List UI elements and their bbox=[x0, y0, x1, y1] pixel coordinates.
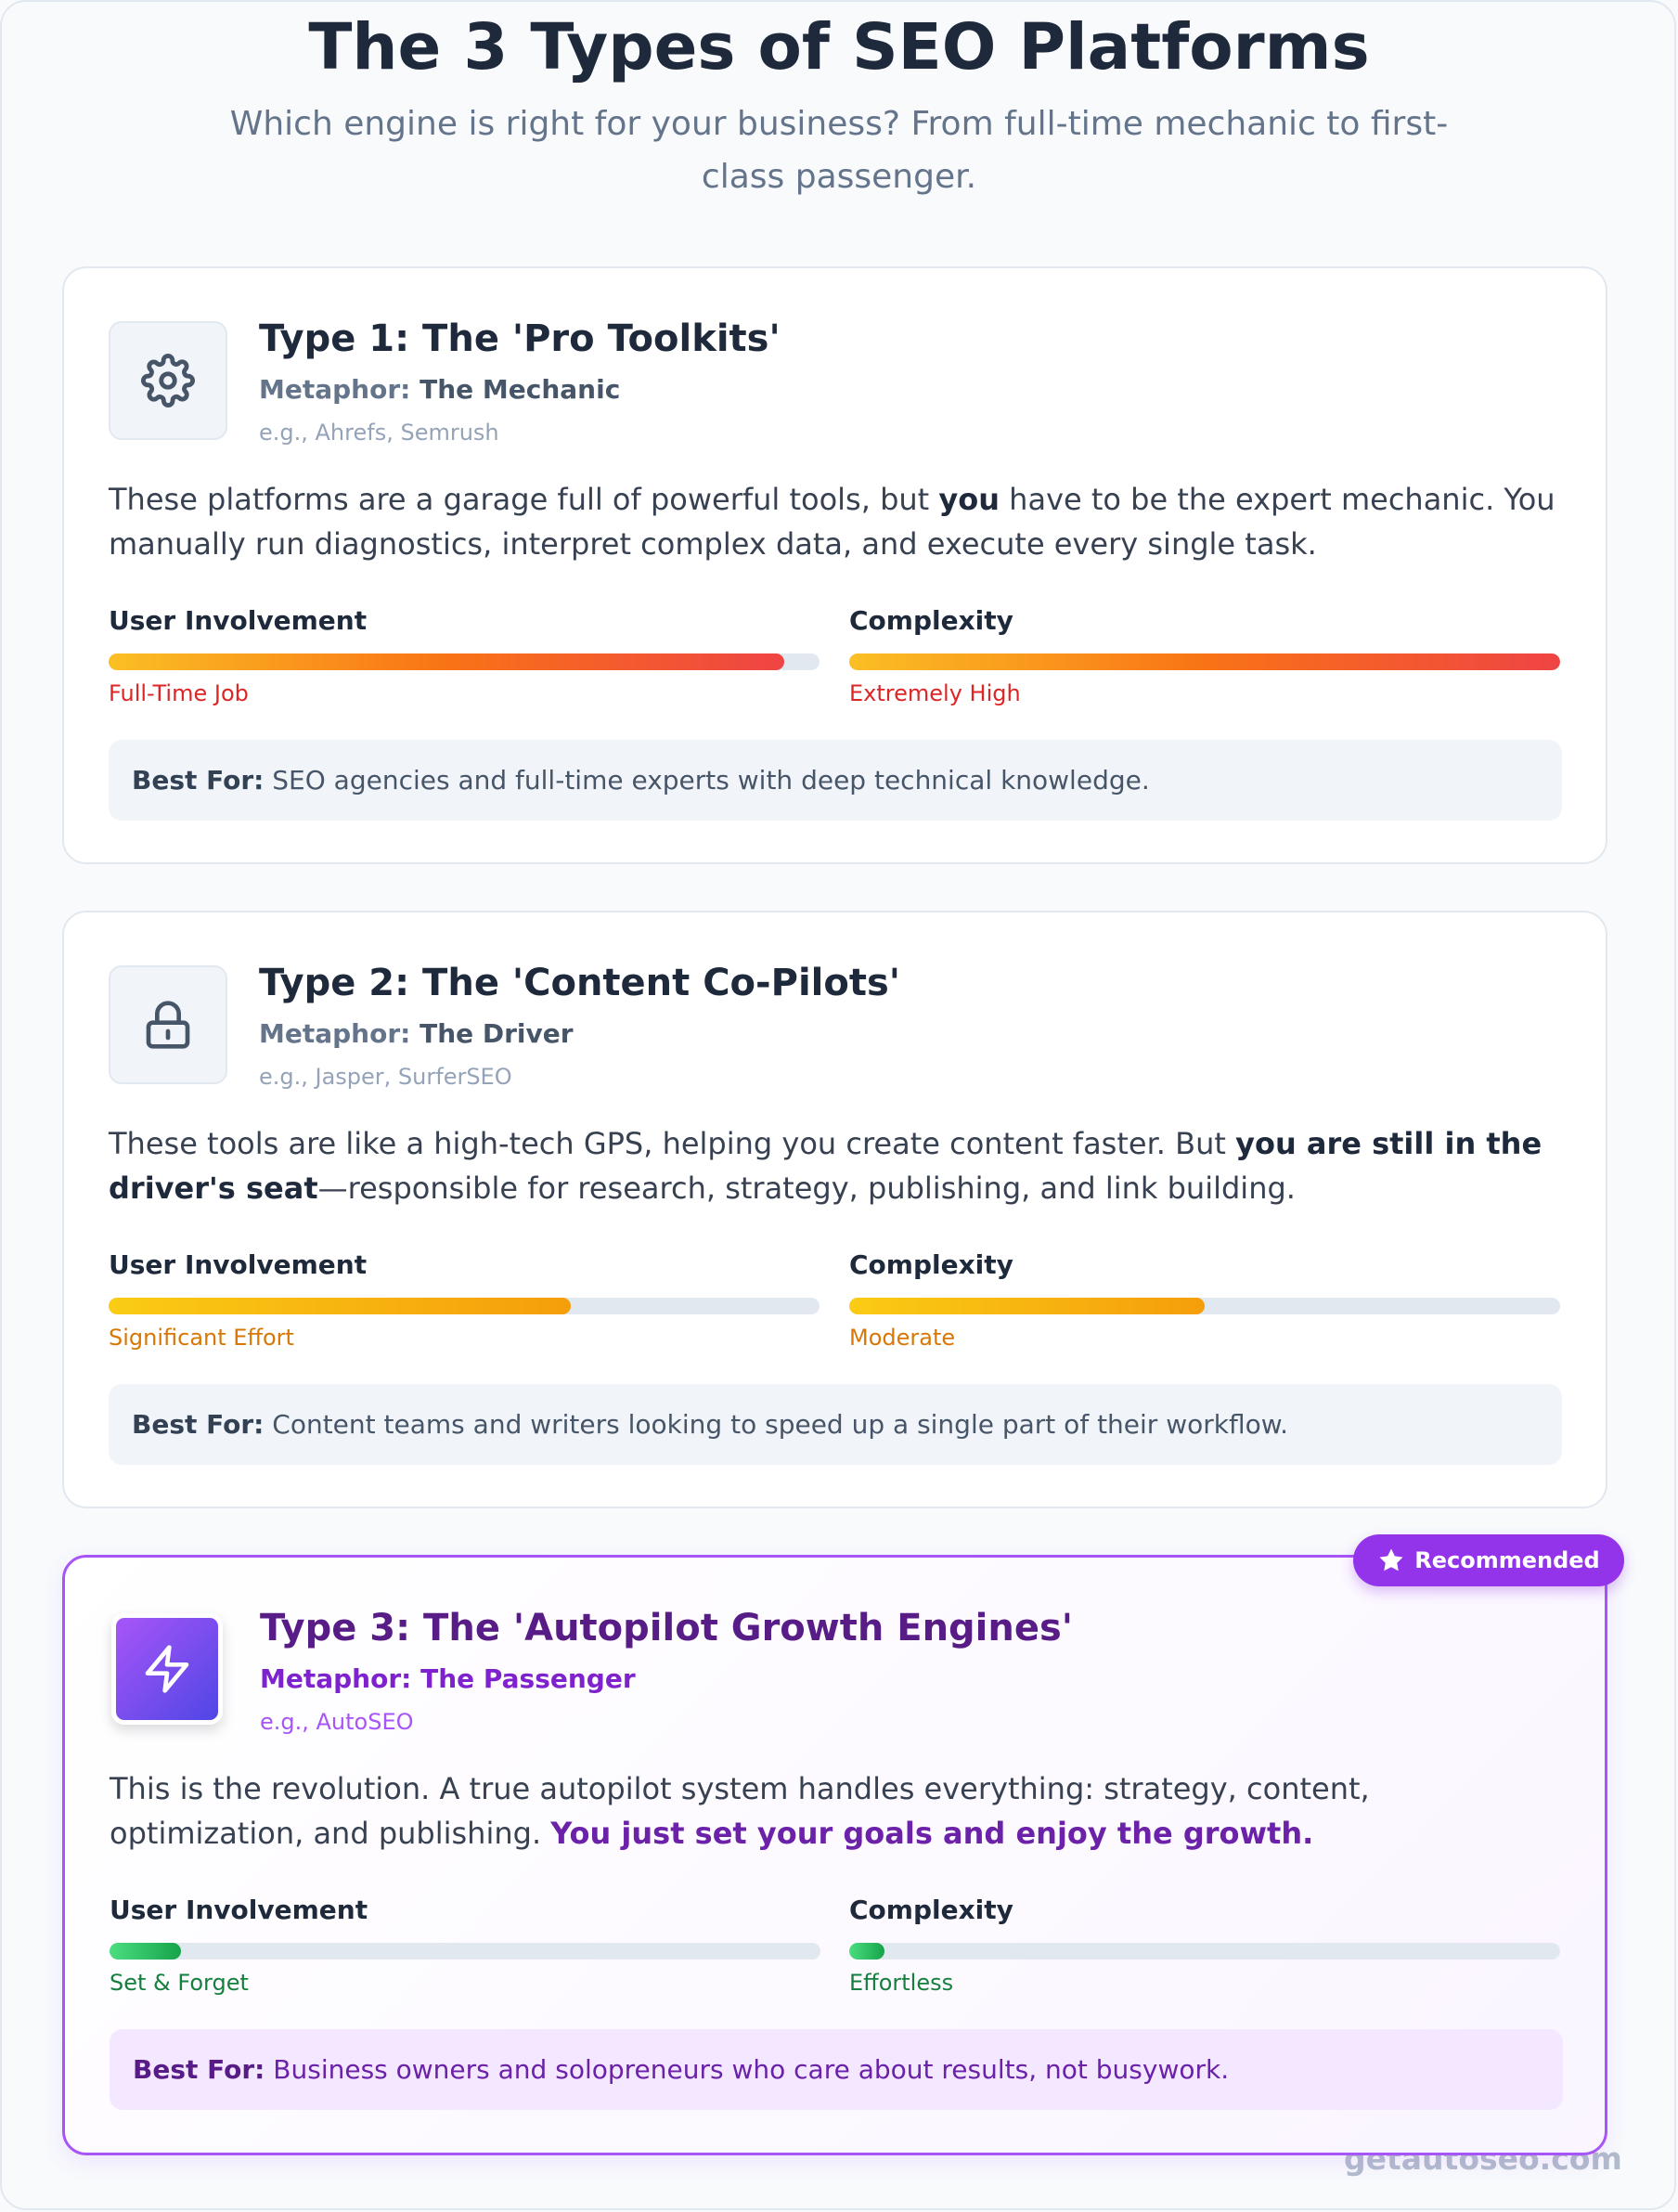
caption: Moderate bbox=[849, 1325, 955, 1351]
metaphor: Metaphor: The Driver bbox=[259, 1018, 574, 1049]
caption: Set & Forget bbox=[110, 1970, 249, 1996]
bar: complexity bbox=[849, 1298, 1560, 1314]
icon: lock bbox=[109, 965, 227, 1084]
icon: gear bbox=[109, 321, 227, 440]
label: user involvement: User Involvement bbox=[109, 1249, 367, 1280]
label: complexity: Complexity bbox=[849, 605, 1013, 636]
best for bbox=[109, 740, 1562, 821]
description: This is the revolution. A true autopilot system handles everything: strategy, content, optimization, and publishing. You just set your goals and enjoy the growth. bbox=[110, 1771, 1370, 1851]
examples: e.g., Ahrefs, Semrush bbox=[259, 420, 499, 446]
label: complexity: Complexity bbox=[849, 1895, 1013, 1925]
best for: Best For: Content teams and writers looking to speed up a single part of their workflow. bbox=[132, 1409, 1288, 1440]
caption: Full-Time Job bbox=[109, 680, 249, 706]
caption: Significant Effort bbox=[109, 1325, 294, 1351]
panel: type 2 bbox=[62, 911, 1607, 1508]
best for bbox=[109, 1384, 1562, 1465]
bar: user involvement bbox=[109, 653, 820, 670]
examples: e.g., AutoSEO bbox=[260, 1709, 414, 1735]
caption: Extremely High bbox=[849, 680, 1021, 706]
best for bbox=[110, 2029, 1563, 2110]
label: user involvement: User Involvement bbox=[110, 1895, 368, 1925]
bar: user involvement bbox=[109, 1298, 820, 1314]
subtitle: Which engine is right for your business? From full-time mechanic to first-class passenger. bbox=[230, 105, 1448, 196]
metaphor: Metaphor: The Passenger bbox=[260, 1663, 636, 1694]
label: user involvement: User Involvement bbox=[109, 605, 367, 636]
description: These platforms are a garage full of powerful tools, but you have to be the expert mechanic. You manually run diagnostics, interpret complex data, and execute every single task. bbox=[109, 482, 1555, 562]
best for: Best For: SEO agencies and full-time experts with deep technical knowledge. bbox=[132, 765, 1150, 796]
badge: recommended: Recommended bbox=[1414, 1547, 1600, 1573]
label: complexity: Complexity bbox=[849, 1249, 1013, 1280]
best for: Best For: Business owners and solopreneurs who care about results, not busywork. bbox=[133, 2054, 1229, 2085]
icon: lightning bbox=[111, 1613, 223, 1725]
icon: star bbox=[1379, 1548, 1403, 1571]
bar: complexity bbox=[849, 1943, 1560, 1960]
heading: Type 3: The 'Autopilot Growth Engines' bbox=[260, 1607, 1073, 1649]
description: These tools are like a high-tech GPS, helping you create content faster. But you are still in the driver's seat—responsible for research, strategy, publishing, and link building. bbox=[109, 1126, 1542, 1206]
bar: user involvement bbox=[110, 1943, 820, 1960]
panel: type 3 bbox=[62, 1555, 1607, 2155]
heading: Type 1: The 'Pro Toolkits' bbox=[259, 317, 781, 360]
title: The 3 Types of SEO Platforms bbox=[308, 10, 1370, 84]
heading: Type 2: The 'Content Co-Pilots' bbox=[259, 962, 900, 1004]
caption: Effortless bbox=[849, 1970, 953, 1996]
watermark: getautoseo.com bbox=[1344, 2141, 1622, 2177]
panel: type 1 bbox=[62, 266, 1607, 864]
examples: e.g., Jasper, SurferSEO bbox=[259, 1064, 512, 1090]
bar: complexity bbox=[849, 653, 1560, 670]
metaphor: Metaphor: The Mechanic bbox=[259, 374, 620, 405]
badge: recommended bbox=[1353, 1534, 1624, 1586]
